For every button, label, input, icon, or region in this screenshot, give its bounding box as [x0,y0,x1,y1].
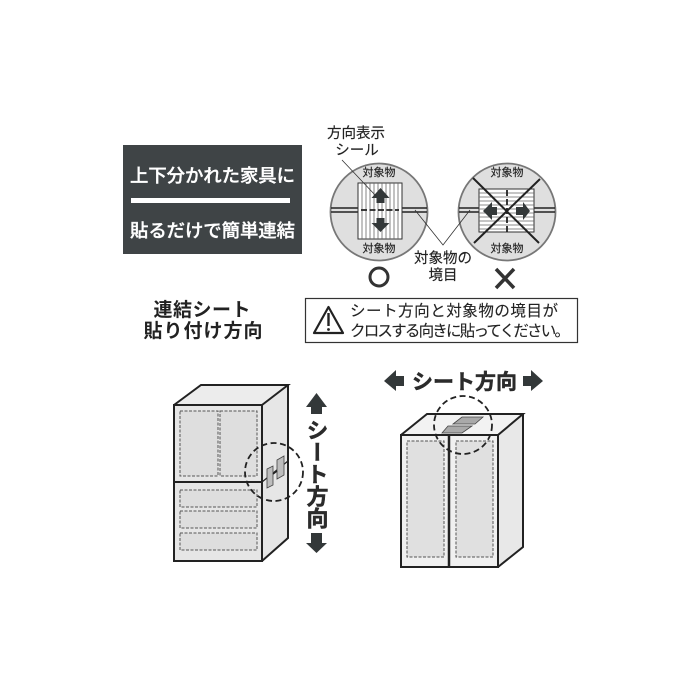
icon: up arrow [306,393,327,414]
icon: right arrow [523,370,543,391]
label: object boundary: 対象物の [414,250,472,267]
wrong example circle: 対象物 [490,241,524,255]
vertical sheet direction label [304,393,328,553]
caution text [350,302,570,340]
caution box [306,298,578,342]
caution text: クロスする向きに貼ってください。 [350,322,570,340]
label: direction sticker [327,125,385,159]
icon: left arrow [483,202,497,220]
heading: sheet attachment direction: 貼り付け方向 [144,319,262,342]
icon: circle mark [370,268,388,286]
label: direction sticker: 方向表示 [327,125,385,142]
correct example circle: 対象物 [362,241,396,255]
icon: down arrow [306,533,327,553]
icon: right arrow [516,202,530,220]
label: direction sticker: シール [335,143,379,159]
wrong example circle: 対象物 [490,165,524,179]
right furniture illustration [401,396,523,567]
correct example circle: 対象物 [362,165,396,179]
dashed callout circle [434,396,492,454]
correct example circle [330,164,428,260]
wrong example circle [458,164,556,260]
icon: left arrow [384,370,404,391]
horizontal sheet direction label [384,370,543,394]
icon: warning triangle [314,307,343,333]
banner line 1: 上下分かれた家具に [130,165,295,186]
heading: sheet attachment direction [144,299,262,342]
horizontal sheet direction label: シート方向 [412,371,517,394]
left furniture illustration [174,385,303,561]
heading: sheet attachment direction: 連結シート [154,299,250,321]
icon: up arrow [372,188,390,203]
sheet stickers [267,456,284,488]
icon: cross mark [496,269,514,288]
vertical sheet direction label: シート方向 [304,419,328,529]
sheet stickers [442,417,483,433]
banner: furniture heading [123,145,302,254]
caution text: シート方向と対象物の境目が [350,302,558,320]
dashed callout circle [245,443,303,501]
leader lines [342,160,470,245]
label: object boundary [414,250,472,284]
icon: down arrow [372,218,390,232]
banner line 2: 貼るだけで簡単連結 [130,220,295,241]
label: object boundary: 境目 [428,267,458,284]
